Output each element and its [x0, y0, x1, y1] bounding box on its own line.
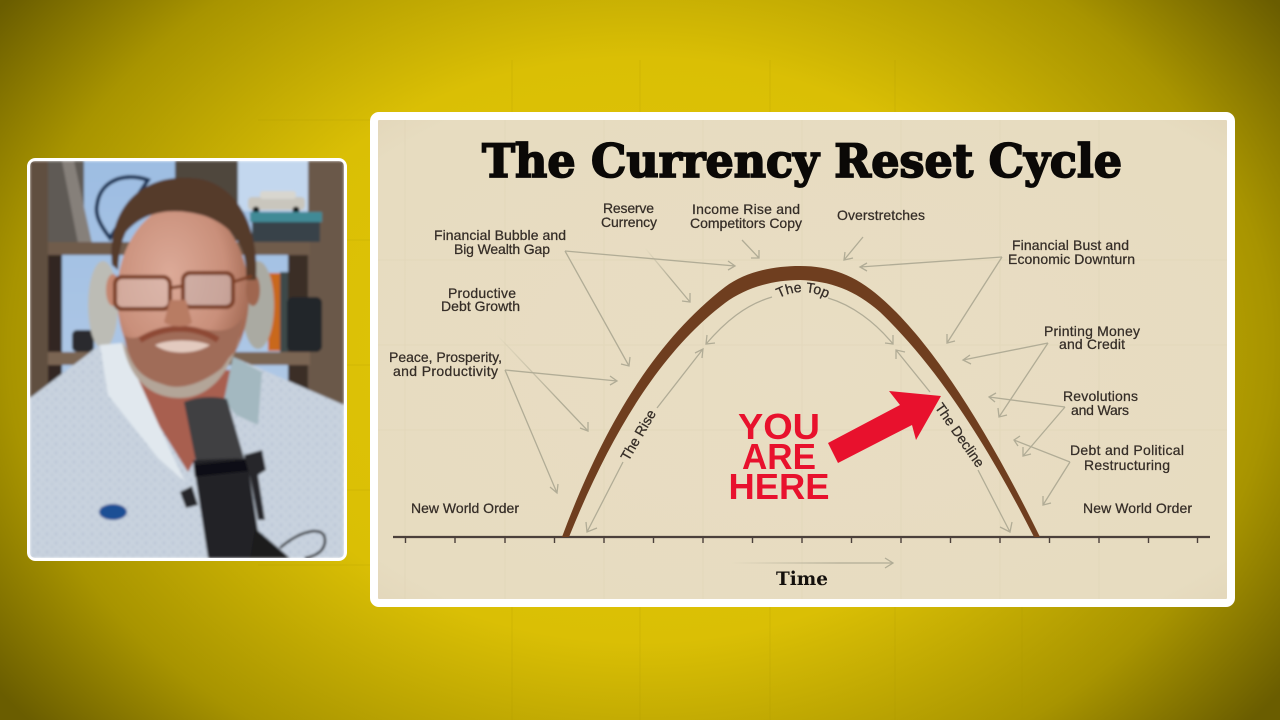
label: productive debt: Productive — [448, 285, 516, 301]
you are here callout: HERE — [728, 466, 830, 507]
arrows: the decline — [896, 350, 1012, 532]
arrow: productive debt — [497, 335, 588, 431]
label: new world order left: New World Order — [411, 500, 519, 516]
label: revolutions and wars: Revolutions — [1063, 388, 1138, 404]
label: financial bust: Economic Downturn — [1008, 251, 1135, 267]
label: income rise: Competitors Copy — [690, 215, 802, 231]
label: reserve currency: Currency — [601, 214, 657, 230]
timeline axis — [393, 537, 1210, 543]
you are here callout: YOU — [738, 406, 820, 447]
label: overstretches: Overstretches — [837, 207, 925, 223]
label: productive debt: Debt Growth — [441, 298, 520, 314]
arrows: the rise — [586, 349, 703, 532]
label: financial bust: Financial Bust and — [1012, 237, 1129, 253]
arrows: revolutions — [989, 393, 1065, 456]
label: income rise: Income Rise and — [692, 201, 800, 217]
label: financial bubble: Financial Bubble and — [434, 227, 566, 243]
label: peace and prosperity: and Productivity — [393, 363, 498, 379]
cycle curve — [562, 266, 1040, 537]
label: the decline: The Decline — [932, 400, 988, 470]
panel frame — [374, 116, 1231, 603]
label: the top: The Top — [775, 282, 829, 299]
label: new world order right: New World Order — [1083, 500, 1192, 516]
label: revolutions and wars: and Wars — [1071, 402, 1129, 418]
red arrow — [828, 391, 941, 463]
arrows: debt restructuring — [1014, 436, 1070, 505]
arrows: peace and prosperity — [505, 370, 617, 493]
time label: Time — [776, 568, 828, 590]
arrows: financial bust — [860, 257, 1002, 343]
arrow: income rise — [742, 240, 759, 258]
label: debt and political restructuring: Restructuring — [1084, 457, 1170, 473]
arrows: financial bubble — [565, 251, 735, 366]
label: printing money: Printing Money — [1044, 323, 1140, 339]
label: debt and political restructuring: Debt and Political — [1070, 442, 1184, 458]
webcam panel: presenter — [28, 160, 346, 560]
label: the rise: The Rise — [617, 407, 659, 463]
arrows: printing money — [963, 343, 1048, 417]
label: printing money: and Credit — [1059, 336, 1125, 352]
time arrow — [730, 558, 893, 568]
arrows: the top — [706, 297, 893, 344]
you are here callout: ARE — [742, 436, 816, 477]
infographic panel — [370, 112, 1235, 607]
label: reserve currency: Reserve — [603, 200, 654, 216]
label: peace and prosperity: Peace, Prosperity, — [389, 349, 502, 365]
arrow: reserve currency — [645, 248, 690, 302]
you are here callout — [728, 406, 830, 507]
title: The Currency Reset Cycle — [482, 134, 1122, 188]
arrow: overstretches — [844, 237, 863, 260]
label: financial bubble: Big Wealth Gap — [454, 241, 550, 257]
